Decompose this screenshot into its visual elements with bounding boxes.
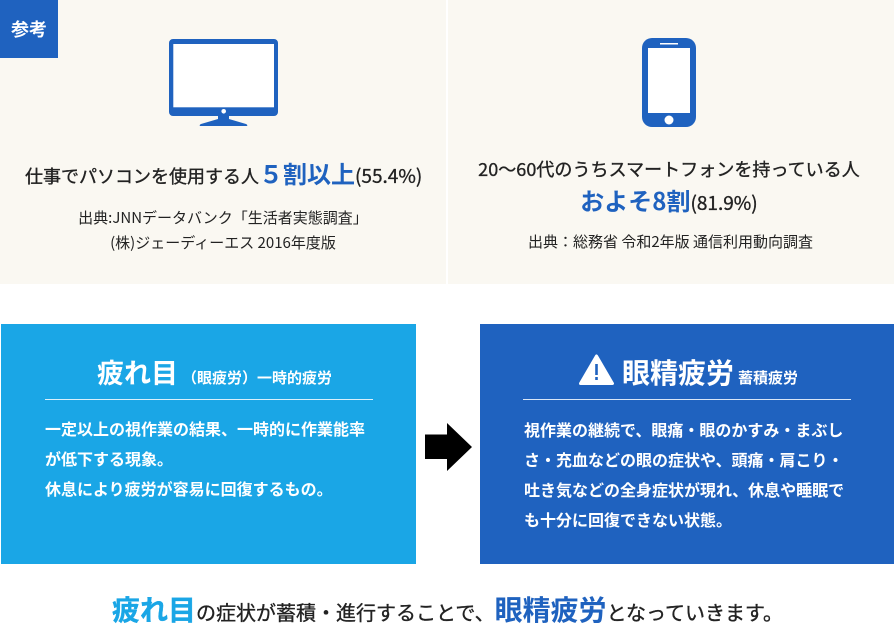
heading: asthenopia: 眼精疲労 蓄積疲労 xyxy=(622,352,798,392)
heading: PC statistic: 仕事でパソコンを使用する人５割以上(55.4%) xyxy=(25,155,422,190)
text: eye fatigue description: が低下する現象。 xyxy=(45,446,173,470)
figure: smartphone percentage: およそ8割(81.9%) xyxy=(580,182,758,217)
text: PC source: 出典:JNNデータバンク「生活者実態調査」 xyxy=(78,207,368,228)
icon: desktop monitor xyxy=(169,39,278,126)
icon: smartphone xyxy=(642,38,696,127)
heading: smartphone statistic: 20〜60代のうちスマートフォンを持っている人 xyxy=(478,156,860,182)
text: eye fatigue description: 休息により疲労が容易に回復するもの。 xyxy=(45,476,333,500)
divider line xyxy=(523,399,851,400)
arrow: progression xyxy=(425,423,472,471)
heading: eye fatigue: 疲れ目 （眼疲労）一時的疲労 xyxy=(97,352,332,391)
text: asthenopia description: さ・充血などの眼の症状や、頭痛・肩こり・ xyxy=(524,447,844,471)
text: asthenopia description: 視作業の継続で、眼痛・眼のかすみ・まぶし xyxy=(524,417,843,441)
text: PC source xyxy=(78,207,368,253)
text: smartphone source: 出典：総務省 令和2年版 通信利用動向調査 xyxy=(528,231,813,252)
divider line xyxy=(45,399,373,400)
badge: reference xyxy=(0,0,58,58)
conclusion text: 疲れ目の症状が蓄積・進行することで、眼精疲労となっていきます。 xyxy=(112,589,783,629)
panel: eye fatigue xyxy=(1,324,416,564)
text: eye fatigue description: 一定以上の視作業の結果、一時的に作業能率 xyxy=(45,416,365,440)
text: asthenopia description xyxy=(524,417,844,531)
panel: smartphone ownership xyxy=(448,0,894,284)
badge: reference: 参考 xyxy=(11,16,47,42)
text: asthenopia description: も十分に回復できない状態。 xyxy=(524,507,732,531)
text: asthenopia description: 吐き気などの全身症状が現れ、休息や睡眠で xyxy=(524,477,844,501)
panel: asthenopia xyxy=(480,324,894,564)
icon: warning triangle xyxy=(579,354,614,385)
text: PC source: (株)ジェーディーエス 2016年度版 xyxy=(110,232,336,253)
text: eye fatigue description xyxy=(45,416,365,500)
panel: PC usage xyxy=(0,0,446,284)
